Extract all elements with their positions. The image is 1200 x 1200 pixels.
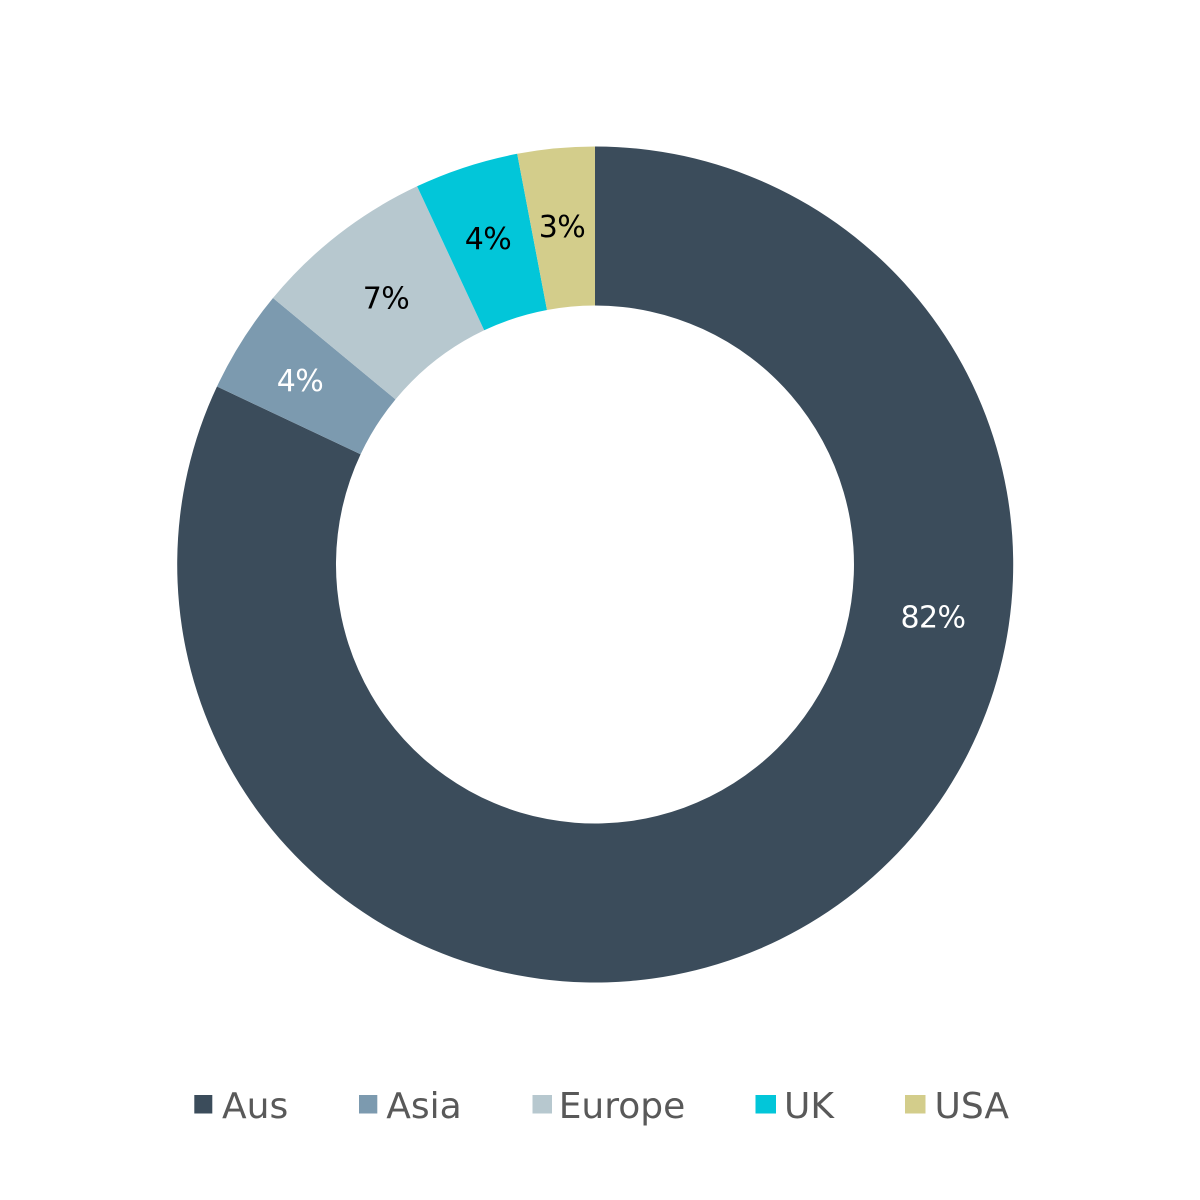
segment: Aus 82%: [177, 146, 1013, 982]
legend item: Europe: Europe: [559, 1086, 685, 1127]
label: USA 3%: 3%: [539, 210, 585, 245]
legend item: Aus: Aus: [222, 1086, 288, 1127]
legend item: UK: UK: [784, 1086, 835, 1127]
legend item: Asia: Asia: [386, 1086, 462, 1127]
segment: Asia 4%: [217, 298, 396, 454]
legend item: USA: USA: [934, 1086, 1009, 1127]
label: Asia 4%: 4%: [277, 364, 323, 399]
label: UK 4%: 4%: [465, 222, 511, 257]
segment: UK 4%: [417, 154, 547, 330]
legend item: UK: [756, 1086, 835, 1127]
segment: Europe 7%: [273, 186, 484, 399]
donut chart: [177, 146, 1013, 982]
legend: [194, 1086, 1009, 1127]
segment: USA 3%: [517, 146, 595, 310]
label: Europe 7%: 7%: [363, 282, 409, 316]
label: Aus 82%: 82%: [901, 600, 965, 636]
